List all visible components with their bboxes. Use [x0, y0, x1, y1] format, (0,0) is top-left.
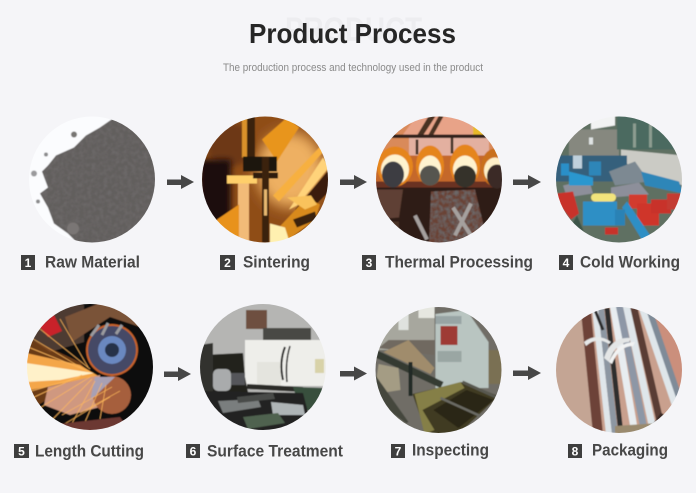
photo 2: sintering furnace	[199, 116, 329, 250]
arrow 1 to 2	[167, 175, 194, 189]
label 7: Inspecting	[412, 442, 489, 460]
label 3: Thermal Processing	[385, 254, 533, 272]
label 4: 4	[563, 256, 570, 270]
ghost heading: PRODUCT	[285, 11, 422, 49]
photo 6: surface treatment lathe	[199, 303, 327, 431]
photo 4: cold working line	[555, 116, 683, 244]
arrow 6 to 7	[340, 366, 367, 380]
label 3: 3	[366, 256, 373, 270]
label 4: Cold Working	[580, 254, 680, 272]
label 1: Raw Material	[45, 254, 140, 272]
label 8: 8	[572, 444, 579, 458]
label 1: 1	[25, 256, 32, 270]
arrow 5 to 6	[164, 367, 191, 381]
label 5: 5	[18, 444, 25, 458]
label 2: Sintering	[243, 254, 310, 272]
title: Product Process	[249, 18, 456, 49]
photo 5: length cutting sparks	[26, 303, 154, 431]
label 6: 6	[190, 444, 197, 458]
label 2: 2	[224, 256, 231, 270]
label 6: Surface Treatment	[207, 442, 343, 460]
photo 8: packaging steel bars	[555, 304, 683, 434]
label 7: 7	[395, 444, 402, 458]
label 5: Length Cutting	[35, 442, 144, 460]
photo 1: raw material powder	[28, 116, 156, 244]
photo 3: thermal processing billets	[375, 116, 509, 244]
arrow 3 to 4	[513, 175, 541, 189]
subtitle: The production process and technology used in the product	[223, 62, 483, 74]
arrow 2 to 3	[340, 175, 367, 189]
label 8: Packaging	[592, 442, 668, 460]
photo 7: inspecting cabinet	[374, 306, 502, 434]
arrow 7 to 8	[513, 366, 541, 380]
header	[223, 11, 483, 74]
